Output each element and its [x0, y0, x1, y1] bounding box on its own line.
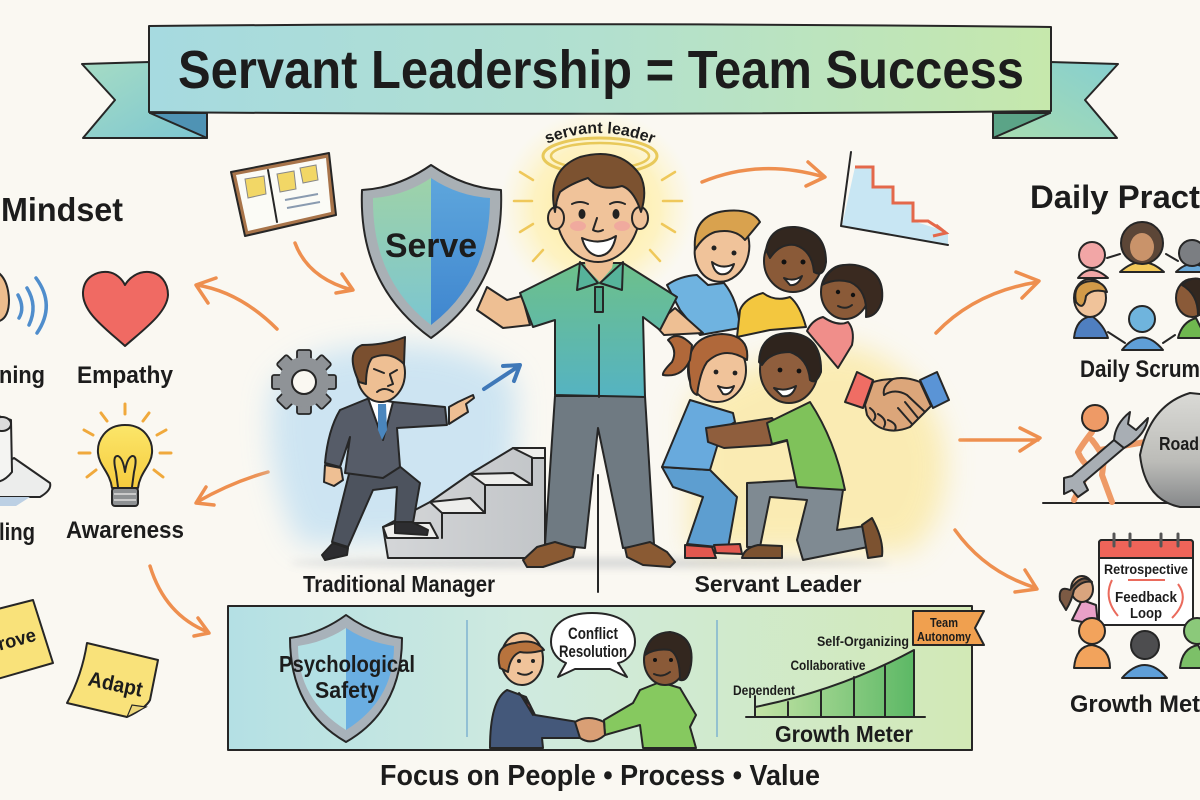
arrow: to mindset bottom [196, 472, 268, 505]
sticky note: adapt: Adapt [86, 668, 145, 702]
manager head [357, 344, 405, 402]
character: traditional manager [322, 337, 474, 560]
manager hair [353, 337, 405, 384]
manager shoes [322, 522, 428, 560]
shield text: Psychological [279, 651, 415, 677]
sticky note: improve [0, 600, 53, 680]
manager shirt and tie [368, 398, 393, 440]
panel background [228, 606, 972, 750]
label: listening: ning [0, 362, 45, 389]
heading: mindset: Mindset [1, 191, 123, 228]
divider below leader [597, 475, 599, 592]
character: teammate in yellow [737, 227, 826, 337]
child hair [689, 334, 747, 395]
leader pants [545, 396, 654, 548]
speech bubble [551, 613, 635, 677]
right ribbon tail [993, 62, 1118, 138]
manager legs [332, 465, 420, 547]
label: healing: ling [0, 519, 35, 546]
scrum circle of people [1074, 222, 1200, 350]
shield label: Serve [385, 227, 477, 265]
helper shoes [742, 518, 882, 558]
yellow wash behind servant team [690, 345, 946, 552]
arrow: to bottom panel [150, 566, 209, 636]
right section: daily practices [1030, 179, 1200, 718]
helper arms [706, 418, 790, 448]
shield: psychological safety [279, 615, 415, 742]
handshake [575, 718, 605, 741]
label: awareness: Awareness [66, 517, 184, 544]
stage: collaborative: Collaborative [790, 657, 866, 673]
feedback loop [1109, 580, 1183, 622]
arrow: blue upward [484, 365, 520, 389]
helper hair [759, 333, 821, 381]
shield: serve [362, 165, 501, 338]
label: growth metrics: Growth Met [1070, 691, 1200, 718]
title: Servant Leadership = Team Success [178, 40, 1024, 100]
arrow: to retrospective [955, 530, 1037, 592]
retrospective participants [1060, 576, 1200, 678]
arrow: to roadblock [960, 428, 1040, 451]
manager jacket and arm [325, 399, 447, 478]
man in suit [490, 690, 580, 748]
label: empathy: Empathy [77, 362, 174, 389]
character: teammate in pink [807, 265, 882, 368]
label: servant leader arched: servant leader [546, 122, 656, 143]
child shoes [685, 544, 742, 558]
child jeans [662, 467, 737, 548]
person: orange [1074, 618, 1110, 668]
helper legs [747, 480, 868, 560]
growth meter area [755, 650, 914, 717]
person: girl with ponytail [1060, 576, 1098, 625]
chart: growth meter [733, 611, 984, 747]
character: kneeling helper [706, 333, 882, 560]
person: blond [1074, 279, 1108, 338]
halo [543, 138, 657, 174]
flag: team autonomy [913, 611, 984, 645]
flag: team autonomy: Team [930, 615, 958, 630]
leader right arm [655, 308, 703, 335]
icon: kanban board [231, 153, 336, 236]
left ribbon tail [82, 62, 207, 138]
person: dark-haired in green [1176, 278, 1200, 338]
calendar heading: Retrospective [1104, 562, 1188, 577]
sticky note: adapt [67, 643, 158, 717]
icon: heart [83, 272, 168, 346]
icon: healing bandage [0, 415, 50, 506]
right ribbon fold [993, 113, 1050, 138]
leader shirt [520, 263, 677, 397]
heading: daily practices: Daily Pract [1030, 179, 1200, 215]
icon: handshake [845, 372, 949, 431]
character: servant leader [477, 154, 703, 567]
scene: conflict resolution handshake [490, 613, 696, 748]
stage: dependent: Dependent [733, 682, 795, 698]
label: traditional manager: Traditional Manager [303, 571, 495, 597]
child head [688, 338, 746, 402]
manager fist [324, 465, 343, 486]
glow rays [514, 172, 682, 261]
title banner [82, 24, 1118, 138]
arrow: to chart [702, 162, 825, 186]
banner body [149, 24, 1051, 114]
leader face [570, 202, 630, 256]
leader collar and placket [577, 262, 623, 290]
arrow: to daily scrum [936, 272, 1039, 333]
person: blue [1122, 306, 1163, 350]
retrospective calendar [1099, 534, 1193, 625]
person: pink [1078, 242, 1108, 278]
label: servant leader: Servant Leader [694, 571, 862, 597]
panel: bottom strip [228, 606, 984, 750]
roadblock boulder [1140, 393, 1200, 507]
illustration: stairs [383, 448, 545, 558]
person: green [1180, 618, 1200, 668]
glow behind servant leader [499, 110, 695, 306]
icon: lightbulb [79, 404, 171, 506]
leader neck [583, 252, 615, 282]
scene: stick figure with wrench [1064, 405, 1148, 502]
boy in green [604, 682, 696, 748]
person: gray [1176, 240, 1200, 272]
shield text second line: Safety [315, 677, 379, 703]
character: child being helped [662, 334, 747, 558]
bubble line two: Resolution [559, 642, 627, 661]
leader left arm [477, 287, 530, 328]
leader head [556, 158, 640, 262]
arrow: to mindset top [196, 278, 277, 329]
leader shoes [523, 542, 675, 567]
arrow: board to shield [295, 243, 353, 293]
stage: self-organizing: Self-Organizing [817, 633, 909, 649]
left ribbon fold [150, 113, 207, 138]
left section: mindset [0, 191, 184, 717]
blue wash behind manager [270, 345, 516, 545]
helper head [760, 335, 818, 403]
manager face [374, 369, 397, 392]
person: woman in yellow [1120, 222, 1164, 272]
icon: listening ear [0, 268, 46, 333]
helper shirt [767, 402, 845, 490]
feedback loop: Feedback [1115, 590, 1178, 606]
growth meter label: Growth Meter [775, 721, 913, 747]
footer tagline: Focus on People • Process • Value [380, 760, 820, 792]
character: blonde teammate [667, 210, 760, 335]
child shirt [662, 400, 735, 470]
ground line [1043, 502, 1200, 504]
leader hair [553, 154, 644, 212]
ground shadow [290, 558, 890, 568]
icon: gear [272, 350, 336, 414]
feedback loop: Loop [1130, 606, 1162, 622]
manager pointing hand [449, 395, 474, 424]
person: dark head [1122, 631, 1167, 678]
chart: declining steps [841, 152, 948, 245]
bubble line one: Conflict [568, 624, 618, 643]
flag: team autonomy: Autonomy [917, 629, 972, 644]
